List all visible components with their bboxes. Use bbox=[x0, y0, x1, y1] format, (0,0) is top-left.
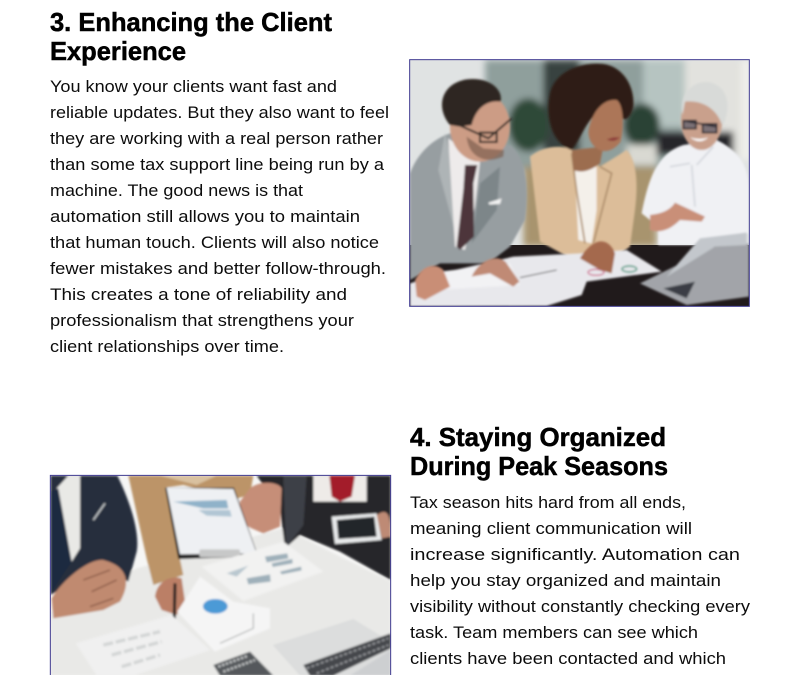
text block: section 4 body: clients have been contacted and which bbox=[410, 649, 726, 668]
text block: section 3 body: fewer mistakes and better follow-through. bbox=[50, 259, 386, 278]
heading: section 3: Experience bbox=[50, 36, 186, 66]
woman blazer bbox=[530, 147, 637, 263]
heading: section 4 bbox=[410, 422, 668, 481]
papers on desk bbox=[202, 542, 323, 601]
text block: section 3 body: This creates a tone of reliability and bbox=[50, 285, 347, 304]
laptop bbox=[640, 243, 749, 305]
text block: section 4 body: increase significantly. Automation can bbox=[410, 545, 740, 564]
text block: section 4 body: Tax season hits hard from all ends, bbox=[410, 493, 686, 512]
heading: section 4: 4. Staying Organized bbox=[410, 422, 666, 452]
laptop bbox=[273, 619, 391, 675]
text block: section 4 body: visibility without constantly checking every bbox=[410, 597, 751, 616]
text block: section 3 body: professionalism that strengthens your bbox=[50, 311, 354, 330]
text block: section 3 body: reliable updates. But they also want to feel bbox=[50, 103, 389, 122]
heading: section 3 bbox=[50, 7, 332, 66]
heading: section 3: 3. Enhancing the Client bbox=[50, 7, 332, 37]
calculator bbox=[213, 652, 273, 675]
documents on table bbox=[410, 233, 749, 307]
text block: section 3 body: client relationships over time. bbox=[50, 337, 284, 356]
text block: section 3 body: than some tax support line being run by a bbox=[50, 155, 385, 174]
text block: section 4 body: task. Team members can see which bbox=[410, 623, 698, 642]
text block: section 3 body bbox=[50, 77, 389, 356]
text block: section 3 body: You know your clients want fast and bbox=[50, 77, 337, 96]
text block: section 3 body: machine. The good news is that bbox=[50, 181, 303, 200]
text block: section 4 body: help you stay organized and maintain bbox=[410, 571, 721, 590]
photo: three colleagues reviewing documents at a laptop bbox=[410, 60, 750, 307]
white shirt woman bbox=[642, 140, 749, 245]
text block: section 3 body: automation still allows you to maintain bbox=[50, 207, 360, 226]
text block: section 3 body: that human touch. Clients will also notice bbox=[50, 233, 379, 252]
text block: section 4 body bbox=[410, 493, 751, 668]
navy suit person bbox=[51, 476, 137, 595]
curly hair bbox=[548, 64, 633, 150]
text block: section 3 body: they are working with a real person rather bbox=[50, 129, 383, 148]
clipboard with report bbox=[165, 488, 258, 559]
heading: section 4: During Peak Seasons bbox=[410, 451, 668, 481]
man suit bbox=[410, 133, 527, 280]
image border bbox=[50, 475, 391, 675]
image border bbox=[410, 60, 749, 306]
tan jacket person bbox=[128, 476, 253, 585]
text block: section 4 body: meaning client communication will bbox=[410, 519, 692, 538]
hands bbox=[415, 266, 450, 300]
photo: team analysing charts and reports on a white desk bbox=[50, 475, 391, 675]
table bbox=[410, 245, 749, 307]
desk bbox=[51, 528, 391, 675]
dark suit person with tablet bbox=[257, 476, 391, 580]
